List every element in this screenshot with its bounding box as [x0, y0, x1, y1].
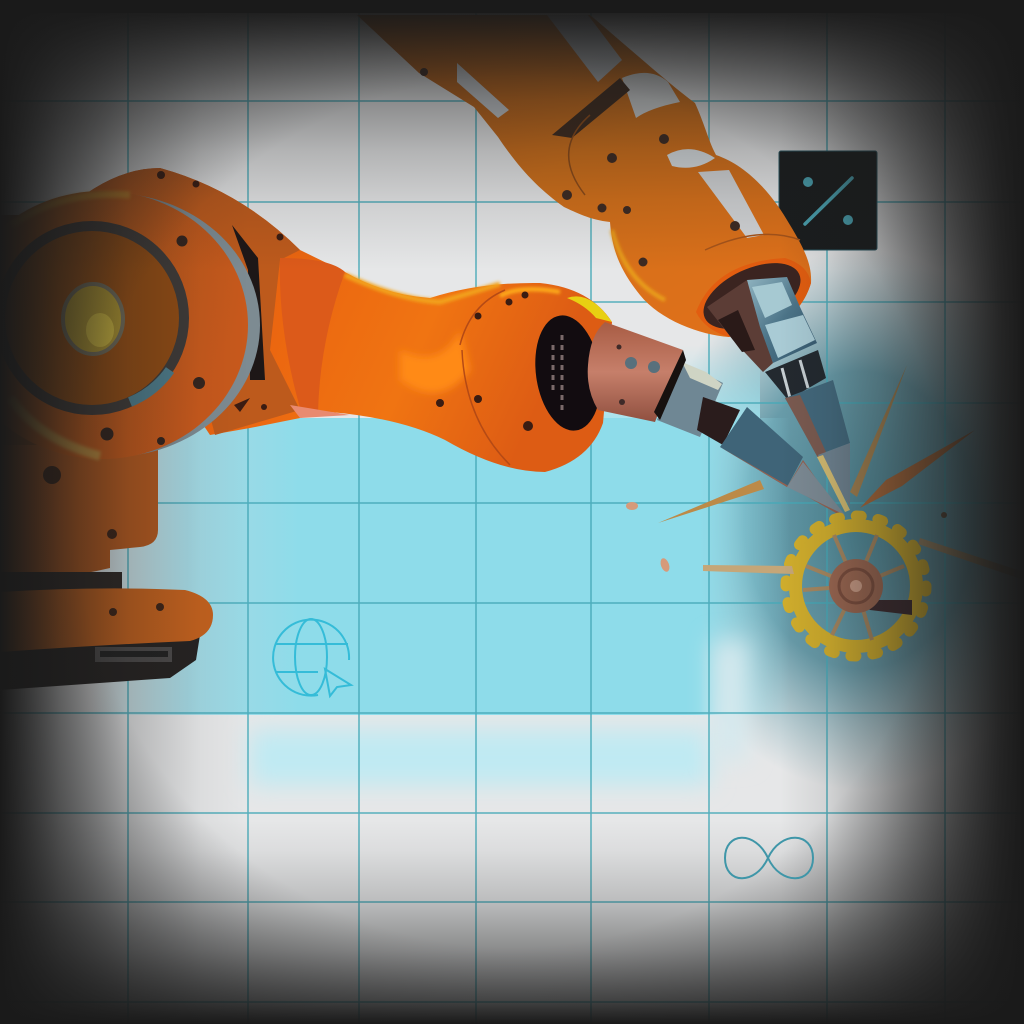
gear: [786, 516, 926, 656]
icon: percent tile: [779, 151, 877, 250]
icon: globe with cursor: [273, 619, 351, 696]
robot arm: main link: [60, 168, 612, 472]
icon: infinity loop: [725, 838, 813, 878]
sparks: [626, 365, 1024, 580]
upper tool head: [693, 250, 850, 507]
robot base: [0, 215, 213, 690]
robot arm: upper arm entering from top: [357, 15, 811, 337]
top edge band: [0, 0, 1024, 13]
big shoulder disc: [0, 191, 260, 459]
lower tool head: [528, 311, 845, 517]
